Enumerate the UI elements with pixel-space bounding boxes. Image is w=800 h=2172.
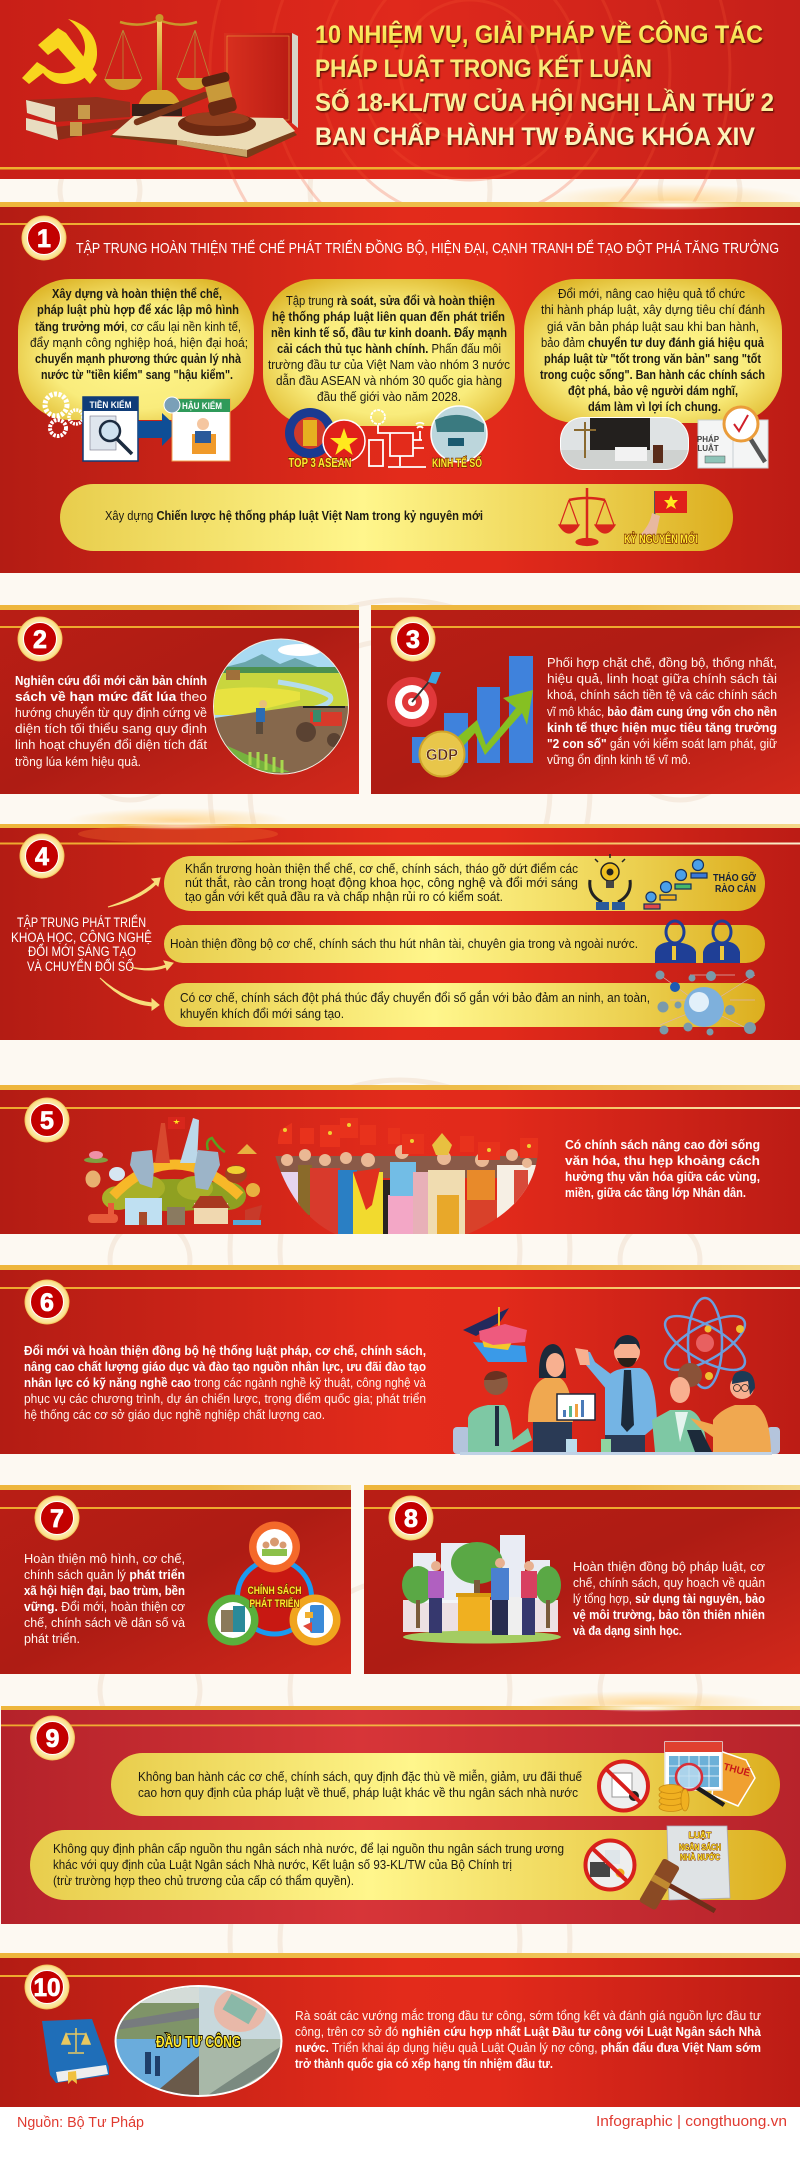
text: public investment: trở thành quốc gia có xếp hạng tín nhiệm đầu tư. xyxy=(295,2056,553,2071)
card: budget decentralisation xyxy=(30,1830,786,1900)
title xyxy=(315,19,774,151)
chart: GDP growth bars xyxy=(412,656,533,763)
label: remove barriers: RÀO CẢN xyxy=(715,882,756,895)
panel: section 3 xyxy=(371,605,800,794)
icon: open book xyxy=(110,116,297,158)
card: digital economy law review: hệ thống pháp luật liên quan đến phát triển xyxy=(272,309,505,324)
image: public investment collage: ĐẦU TƯ CÔNG xyxy=(156,2033,241,2051)
icon: law document and magnifier xyxy=(697,407,768,468)
text: fiscal policy xyxy=(547,655,777,767)
label: remove barriers: THÁO GỠ xyxy=(713,871,756,884)
card: legal framework: Xây dựng và hoàn thiện thể chế, xyxy=(52,286,222,301)
badge 3: 3 xyxy=(406,626,420,654)
card: digital transformation xyxy=(164,983,765,1027)
text: social development: phát triển. xyxy=(24,1631,80,1646)
arrow: to post-inspection xyxy=(138,413,179,446)
text: education: Đổi mới và hoàn thiện đồng bộ hệ thống luật pháp, cơ chế, chính sách, xyxy=(24,1343,426,1358)
icon: red upright law book xyxy=(224,33,298,128)
image: rice fields xyxy=(213,638,349,774)
badge 2: 2 xyxy=(33,626,47,654)
card: digital economy law review xyxy=(263,279,515,426)
text: culture: Có chính sách nâng cao đời sống xyxy=(565,1137,760,1152)
icon: target xyxy=(387,672,441,727)
card: digital transformation: khuyến khích đổi mới sáng tạo. xyxy=(180,1006,344,1021)
badge 8 xyxy=(388,1496,434,1540)
icon: digital devices xyxy=(369,410,426,467)
badge 7: 7 xyxy=(50,1505,64,1533)
section 4 heading: TẬP TRUNG PHÁT TRIỂN xyxy=(17,915,146,930)
icon: scales of justice xyxy=(104,14,211,116)
panel: section 8 xyxy=(364,1485,800,1674)
card: remove bottlenecks: Khẩn trương hoàn thiện thể chế, cơ chế, chính sách, tháo gỡ dứt điểm các xyxy=(185,861,579,876)
card: law enforcement: dám làm vì lợi ích chung. xyxy=(588,399,721,414)
icon: pre-inspection document xyxy=(83,397,138,461)
label: development policy: CHÍNH SÁCH xyxy=(248,1584,302,1597)
text: fiscal policy: kinh tế thực hiện mục tiêu tăng trưởng xyxy=(547,720,777,735)
text: education xyxy=(24,1343,427,1422)
arrow: to item 2 xyxy=(130,961,173,970)
card: digital economy law review: dẫn đầu ASEAN và nhóm 30 quốc gia hàng xyxy=(276,373,502,388)
footer: credit: Infographic | congthuong.vn xyxy=(596,2113,787,2130)
text: fiscal policy: hiệu quả, linh hoạt giữa chính sách tài xyxy=(547,671,777,686)
label: new era: KỶ NGUYÊN MỚI xyxy=(624,533,698,546)
card: budget decentralisation: (trừ trường hợp theo chủ trương của cấp có thẩm quyền). xyxy=(53,1873,354,1888)
card: legal framework: nước từ "tiền kiểm" sang "hậu kiểm". xyxy=(41,367,233,382)
badge 1 xyxy=(22,216,66,260)
text: rice land: diện tích tối thiểu sang quy định xyxy=(15,721,207,736)
text: rice land: Nghiên cứu đổi mới căn bản chính xyxy=(15,673,207,688)
illustration: environment cleanup xyxy=(402,1535,561,1644)
text: public investment xyxy=(295,2008,762,2071)
illustration: Vietnamese landmarks xyxy=(84,1117,262,1225)
card: remove bottlenecks: nút thắt, rào cản trong hoạt động khoa học, công nghệ và đổi mới sáng xyxy=(185,875,578,890)
icon: law document and magnifier: LUẬT xyxy=(697,444,719,453)
text: fiscal policy: vĩ mô khác, bảo đảm cung ứng vốn cho nền xyxy=(547,704,777,719)
label: remove barriers xyxy=(713,871,756,895)
text: education: nhân lực có kỹ năng nghề cao trong các ngành nghề kỹ thuật, công nghệ và xyxy=(24,1375,427,1390)
card: digital economy law review: cải cách thủ tục hành chính. Phấn đấu môi xyxy=(277,341,501,356)
card: attract talent: Hoàn thiện đồng bộ cơ chế, chính sách thu hút nhân tài, chuyên gia trong và ngoài nước. xyxy=(170,936,638,951)
text: culture: miền, giữa các tầng lớp Nhân dân. xyxy=(565,1185,746,1200)
arrow: to item 1 xyxy=(108,878,160,907)
card: law enforcement: thi hành pháp luật, xây dựng tiêu chí đánh xyxy=(541,302,765,317)
diagram: development policy xyxy=(208,1522,340,1646)
card: budget decentralisation: khác với quy định của Luật Ngân sách Nhà nước, Kết luận số 93-KL/TW của Bộ Chính trị xyxy=(53,1857,512,1872)
badge 10: 10 xyxy=(34,1974,60,2002)
text: environment: Hoàn thiện đồng bộ pháp luật, cơ xyxy=(573,1559,766,1574)
card: digital economy law review: đầu thế giới vào năm 2028. xyxy=(317,389,461,404)
text: social development: xã hội hiện đại, bao trùm, bền xyxy=(24,1583,185,1598)
text: culture: hưởng thụ văn hóa giữa các vùng, xyxy=(565,1169,760,1184)
title: 10 NHIỆM VỤ, GIẢI PHÁP VỀ CÔNG TÁC xyxy=(315,19,763,49)
panel: section 6 xyxy=(0,1265,800,1455)
icon: state budget law book xyxy=(667,1826,730,1900)
icon: graduation cap and books xyxy=(463,1307,527,1362)
badge 3 xyxy=(390,616,436,662)
icon: post-inspection document xyxy=(164,397,230,461)
label: development policy: PHÁT TRIỂN xyxy=(250,1597,300,1610)
image: festival crowd in heart shape xyxy=(270,1118,540,1234)
icon: ASEAN badge xyxy=(285,408,335,458)
panel: section 2 xyxy=(0,605,359,794)
text: public investment: nước. Triển khai áp dụng hiệu quả Luật Quản lý nợ công, phấn đấu đưa Việt Nam sớm xyxy=(295,2040,761,2055)
section 4 heading: VÀ CHUYỂN ĐỔI SỐ xyxy=(27,959,134,974)
panel: section 10 xyxy=(0,1953,800,2107)
text: environment: chế, chính sách, quy hoạch về quản xyxy=(573,1575,765,1590)
text: environment xyxy=(573,1559,766,1638)
text: fiscal policy: "2 con số" gắn với kiểm soát lạm phát, giữ xyxy=(547,736,777,751)
card: law enforcement: trong cuộc sống". Ban hành các chính sách xyxy=(540,367,765,382)
icon: global network xyxy=(656,970,756,1036)
title: BAN CHẤP HÀNH TW ĐẢNG KHÓA XIV xyxy=(315,121,755,151)
badge 1: 1 xyxy=(37,225,51,253)
card: remove bottlenecks xyxy=(164,856,765,911)
icon: flag in hand xyxy=(640,491,687,536)
text: public investment: công, trên cơ sở đó nghiên cứu hợp nhất Luật Đầu tư công với Luật Ngân sách Nhà xyxy=(295,2024,762,2039)
icon: steps xyxy=(644,860,707,909)
label: top 3 ASEAN: TOP 3 ASEAN xyxy=(288,455,352,470)
card: tax incentives: cao hơn quy định của pháp luật về thuế, pháp luật khác về thu ngân sách nhà nước xyxy=(138,1785,579,1800)
badge 10 xyxy=(24,1964,70,2010)
illustration: team meeting xyxy=(453,1335,780,1455)
badge 9: 9 xyxy=(46,1725,59,1753)
icon: talent people xyxy=(655,921,740,963)
text: social development: chế, chính sách về dân số và xyxy=(24,1615,186,1630)
label: digital economy: KINH TẾ SỐ xyxy=(432,455,482,470)
icon: state budget law book: LUẬT xyxy=(689,1829,712,1840)
text: culture: văn hóa, thu hẹp khoảng cách xyxy=(565,1153,760,1168)
text: education: phục vụ các chương trình, dự án chiến lược, trọng điểm quốc gia; phát triển xyxy=(24,1391,426,1406)
icon: blue law book xyxy=(42,2019,109,2084)
card: law enforcement: đột phá, bảo vệ người dám nghĩ, xyxy=(568,383,738,398)
section 4 heading: ĐỔI MỚI SÁNG TẠO xyxy=(28,944,136,959)
text: culture xyxy=(565,1137,760,1200)
icon: budget gavel xyxy=(639,1858,715,1911)
icon: pre-inspection document: TIỀN KIỂM xyxy=(90,399,132,411)
card: tax incentives: Không ban hành các cơ chế, chính sách, quy định đặc thù về miễn, giảm, ưu đãi thuế xyxy=(138,1769,582,1784)
section 4 heading: KHOA HỌC, CÔNG NGHỆ xyxy=(11,930,152,945)
text: social development xyxy=(24,1551,186,1646)
card: digital economy law review: trường đầu tư của Việt Nam vào nhóm 3 nước xyxy=(268,357,511,372)
icon: tax calendar xyxy=(659,1742,755,1812)
icon: phone node xyxy=(290,1594,340,1646)
card: remove bottlenecks: tạo gắn với kết quả đầu ra và chấp nhận rủi ro có kiểm soát. xyxy=(185,889,503,904)
image: public investment collage xyxy=(114,1985,283,2097)
card: legal framework xyxy=(18,279,254,420)
icon: no budget xyxy=(586,1840,634,1890)
card: legal framework: chuyển mạnh phương thức quản lý nhà xyxy=(35,351,242,366)
card: legal framework: pháp luật phù hợp để xác lập mô hình xyxy=(37,302,239,317)
image: lawyer signing xyxy=(560,417,689,470)
icon: post-inspection document: HẬU KIỂM xyxy=(182,400,222,412)
header banner xyxy=(0,0,800,330)
card: digital economy law review: Tập trung rà soát, sửa đổi và hoàn thiện xyxy=(286,293,495,308)
text: education: hệ thống các cơ sở giáo dục nghề nghiệp chất lượng cao. xyxy=(24,1407,325,1422)
icon: state budget law book: NHÀ NƯỚC xyxy=(680,1851,720,1862)
icon: gavel xyxy=(137,71,256,136)
label: development policy xyxy=(248,1584,302,1610)
icon: bulb in hands xyxy=(590,854,630,910)
card: law enforcement: Đổi mới, nâng cao hiệu quả tổ chức xyxy=(558,286,746,301)
text: rice land: hướng chuyển từ quy định cứng về xyxy=(15,705,207,720)
icon: law document and magnifier: PHÁP xyxy=(697,435,720,444)
card: legal framework: đẩy mạnh công nghiệp hoá, hiện đại hoá; xyxy=(30,335,248,350)
badge 9 xyxy=(30,1716,75,1760)
icon: hammer and sickle xyxy=(22,19,97,84)
panel: section 9 xyxy=(1,1691,800,1924)
text: rice land: sách về hạn mức đất lúa theo xyxy=(15,689,207,704)
text: social development: Hoàn thiện mô hình, cơ chế, xyxy=(24,1551,185,1566)
badge 4: 4 xyxy=(35,843,49,871)
text: environment: lý tổng hợp, sử dụng tài nguyên, bảo xyxy=(573,1591,765,1606)
text: social development: chính sách quản lý phát triển xyxy=(24,1567,185,1582)
image: digital economy circle xyxy=(431,406,487,462)
card: law enforcement: bảo đảm chuyển tư duy đánh giá hiệu quả xyxy=(541,335,765,350)
title: PHÁP LUẬT TRONG KẾT LUẬN xyxy=(315,53,652,83)
text: environment: và đa dạng sinh học. xyxy=(573,1623,682,1638)
icon: state budget law book: NGÂN SÁCH xyxy=(679,1841,721,1852)
icon: Vietnam flag badge xyxy=(323,420,365,462)
icon: tax calendar: THUẾ xyxy=(722,1760,752,1780)
badge 5 xyxy=(24,1098,70,1142)
card: tax incentives xyxy=(111,1753,780,1816)
card: law enforcement: pháp luật từ "tốt trong văn bản" sang "tốt xyxy=(544,351,762,366)
text: education: nâng cao chất lượng giáo dục và đào tạo nguồn nhân lực, ưu đãi đào tạo xyxy=(24,1359,426,1374)
badge 4 xyxy=(20,834,64,878)
badge 8: 8 xyxy=(404,1505,418,1533)
card: digital transformation: Có cơ chế, chính sách đột phá thúc đẩy chuyển đổi số gắn với bảo đảm an ninh, an toàn, xyxy=(180,990,650,1005)
card: law enforcement: giá văn bản pháp luật sau khi ban hành, xyxy=(547,319,759,334)
card: legal system strategy xyxy=(60,484,733,551)
text: fiscal policy: vững ổn định kinh tế vĩ mô. xyxy=(547,752,691,767)
card: budget decentralisation: Không quy định phân cấp nguồn thu ngân sách nhà nước, để lại nguồn thu ngân sách trung ương xyxy=(53,1841,564,1856)
card: legal framework: tăng trưởng mới, cơ cấu lại nền kinh tế, xyxy=(35,319,241,334)
text: fiscal policy: Phối hợp chặt chẽ, đồng bộ, thống nhất, xyxy=(547,655,777,670)
icon: no document stamp xyxy=(599,1762,648,1810)
card: legal system strategy: Xây dựng Chiến lược hệ thống pháp luật Việt Nam trong kỷ nguyên mới xyxy=(105,508,483,523)
card: attract talent xyxy=(164,925,765,963)
badge 2 xyxy=(18,616,62,662)
card: law enforcement xyxy=(524,279,782,423)
badge 5: 5 xyxy=(40,1107,54,1135)
panel: section 1 xyxy=(0,184,800,573)
icon: GDP coin xyxy=(420,732,464,776)
text: rice land: linh hoạt chuyển đổi diện tích đất xyxy=(15,737,207,752)
title: SỐ 18-KL/TW CỦA HỘI NGHỊ LẦN THỨ 2 xyxy=(315,87,774,117)
icon: atom xyxy=(658,1298,752,1388)
icon: red scales xyxy=(559,488,615,546)
icon: GDP coin: GDP xyxy=(426,747,458,764)
panel: section 5 xyxy=(0,1085,800,1234)
badge 6 xyxy=(24,1280,70,1324)
text: public investment: Rà soát các vướng mắc trong đầu tư công, sớm tổng kết và đánh giá nguồn lực đầu tư xyxy=(295,2008,761,2023)
footer: source: Nguồn: Bộ Tư Pháp xyxy=(17,2114,144,2131)
section 4 heading xyxy=(11,915,152,974)
text: rice land: trồng lúa kém hiệu quả. xyxy=(15,754,141,769)
card: digital economy law review: nền kinh tế số, đầu tư kinh doanh. Đẩy mạnh xyxy=(271,325,507,340)
badge 6: 6 xyxy=(40,1289,54,1317)
badge 7 xyxy=(34,1496,80,1540)
text: environment: vệ môi trường, bảo tồn thiên nhiên xyxy=(573,1607,765,1622)
arrow: to item 3 xyxy=(100,978,159,1010)
icon: stacked old books xyxy=(26,97,137,140)
icon: people node xyxy=(249,1522,300,1572)
panel: section 4 xyxy=(0,808,800,1040)
text: fiscal policy: khoá, chính sách tiền tệ và các chính sách xyxy=(547,687,777,702)
text: social development: vững. Đổi mới, hoàn thiện cơ xyxy=(24,1599,186,1614)
icon: building node xyxy=(208,1594,258,1646)
text: rice land xyxy=(15,673,207,769)
icon: gears xyxy=(45,394,83,436)
panel: section 7 xyxy=(0,1485,351,1674)
